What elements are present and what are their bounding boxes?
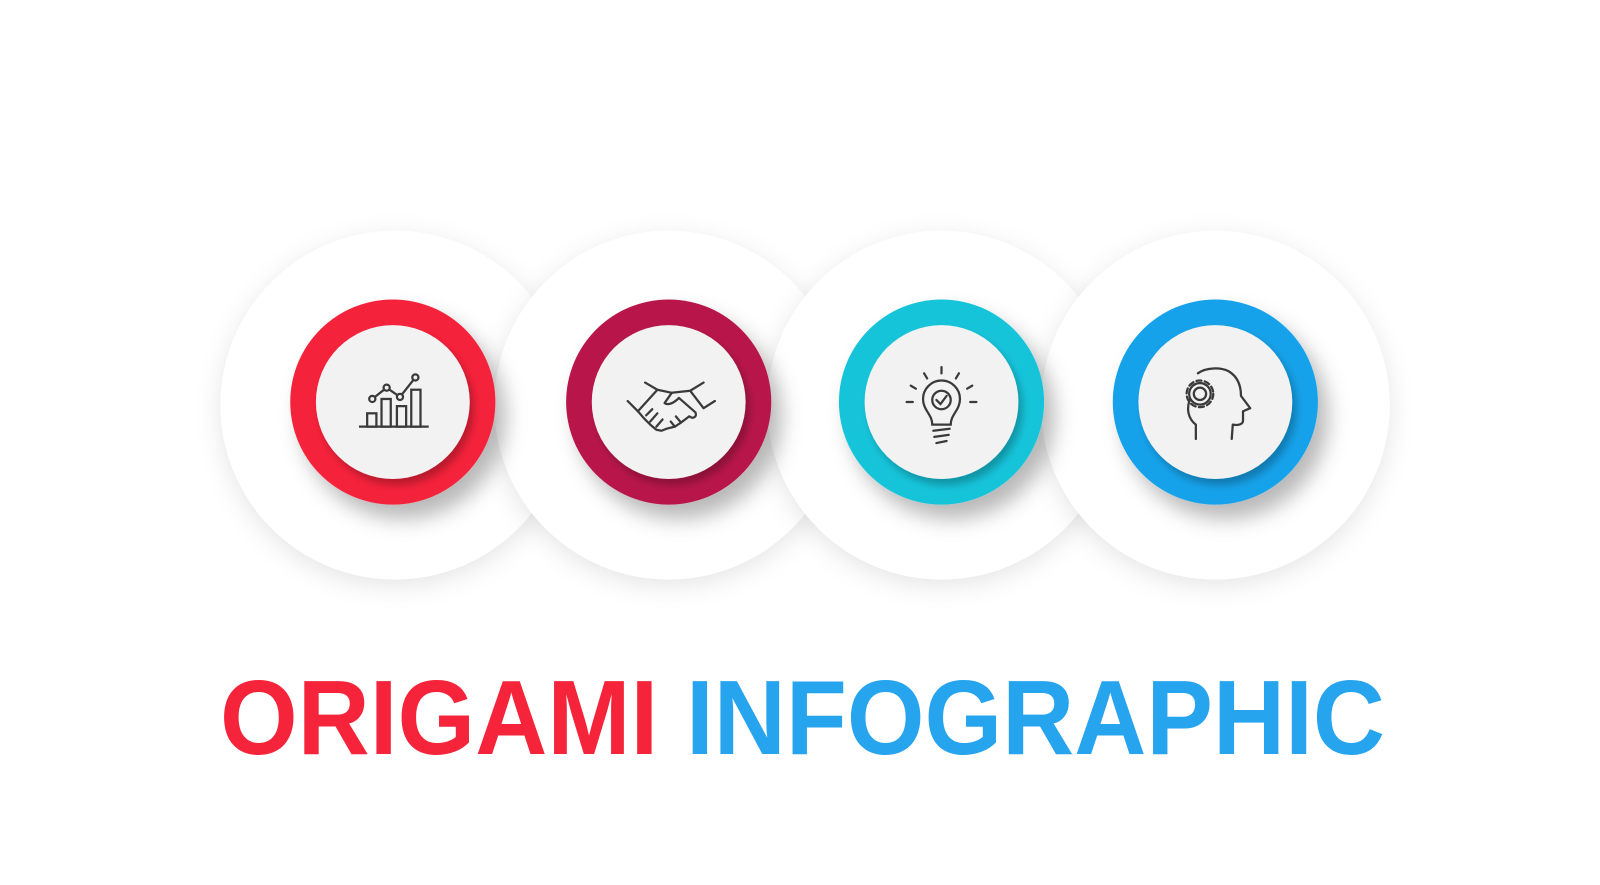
panel: step 3 cyan ring bbox=[839, 299, 1044, 505]
title: ORIGAMI INFOGRAPHIC bbox=[220, 659, 1385, 777]
panel: background circle 4 bbox=[1041, 231, 1390, 579]
icon: head with gear bbox=[1187, 368, 1250, 439]
panel: background circle 1 bbox=[221, 231, 569, 579]
icon: lightbulb bbox=[907, 367, 976, 443]
icon: handshake bbox=[628, 383, 715, 431]
panel: background circle 2 bbox=[494, 231, 843, 579]
panel: background circle 3 bbox=[767, 231, 1116, 579]
icon: growth chart bbox=[359, 374, 429, 427]
panel: step 1 red ring bbox=[290, 299, 495, 505]
panel: step 4 blue ring bbox=[1113, 299, 1318, 505]
panel: step 2 crimson ring bbox=[566, 299, 771, 505]
panel: circles row bbox=[221, 231, 1390, 579]
